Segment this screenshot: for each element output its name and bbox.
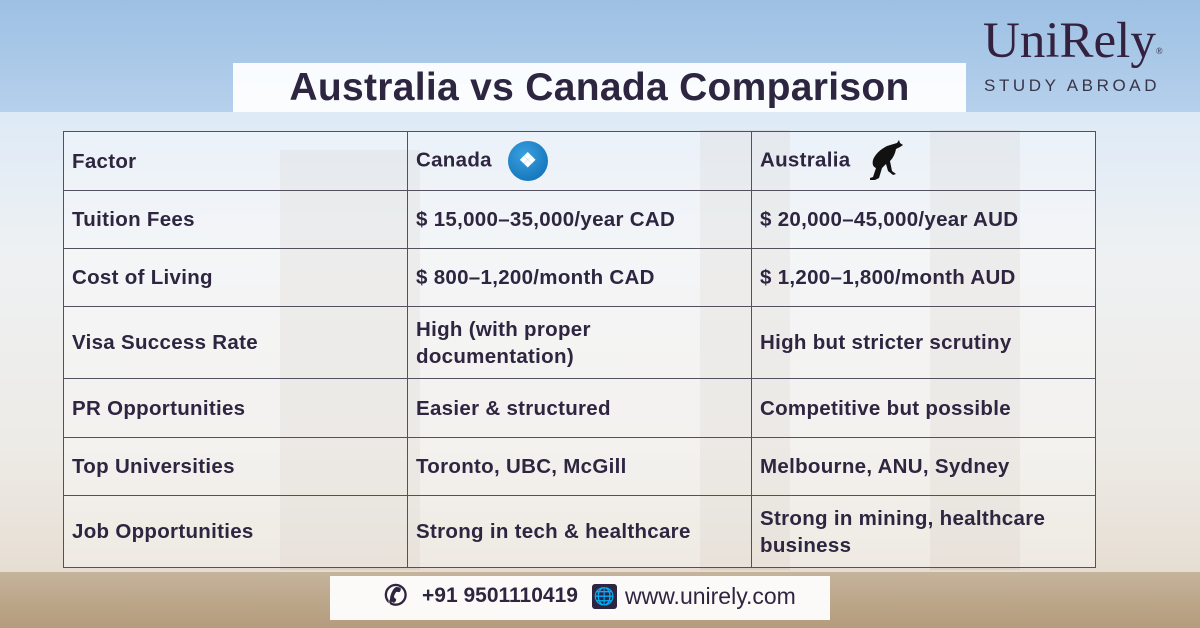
comparison table: Cost of Living [72, 266, 213, 289]
comparison table: business [760, 534, 851, 556]
comparison table: documentation) [416, 344, 574, 368]
comparison table: Job Opportunities [72, 520, 254, 543]
comparison table [63, 131, 1096, 568]
logo: UniRely® [983, 13, 1163, 69]
comparison table: Top Universities [72, 455, 235, 478]
footer contact bar: +91 9501110419 [422, 584, 578, 607]
comparison table: Competitive but possible [760, 396, 1011, 420]
comparison table: ❖ [519, 150, 537, 172]
icon: globe: 🌐 [594, 587, 615, 606]
comparison table: Visa Success Rate [72, 331, 258, 354]
comparison table: High (with proper [416, 318, 591, 340]
icon: globe [592, 584, 617, 609]
comparison table: $ 20,000–45,000/year AUD [760, 208, 1018, 231]
icon: phone: ✆ [384, 580, 407, 611]
comparison table: $ 1,200–1,800/month AUD [760, 266, 1016, 289]
footer contact bar: www.unirely.com [625, 583, 796, 609]
comparison table: $ 15,000–35,000/year CAD [416, 208, 675, 231]
comparison table: Strong in tech & healthcare [416, 520, 691, 543]
logo [983, 13, 1163, 95]
comparison table: Tuition Fees [72, 208, 195, 231]
title: Australia vs Canada Comparison [289, 66, 910, 109]
comparison table: Toronto, UBC, McGill [416, 455, 627, 478]
comparison table: PR Opportunities [72, 396, 245, 420]
comparison table: Easier & structured [416, 396, 611, 420]
comparison table: Melbourne, ANU, Sydney [760, 455, 1010, 478]
comparison table: Australia [760, 148, 850, 171]
comparison table: Strong in mining, healthcare [760, 506, 1045, 530]
logo: STUDY ABROAD [984, 76, 1160, 95]
footer contact bar [330, 576, 830, 620]
comparison table: High but stricter scrutiny [760, 331, 1012, 354]
comparison table: $ 800–1,200/month CAD [416, 266, 655, 289]
comparison table: Factor [72, 150, 136, 172]
comparison table: Canada [416, 148, 492, 171]
